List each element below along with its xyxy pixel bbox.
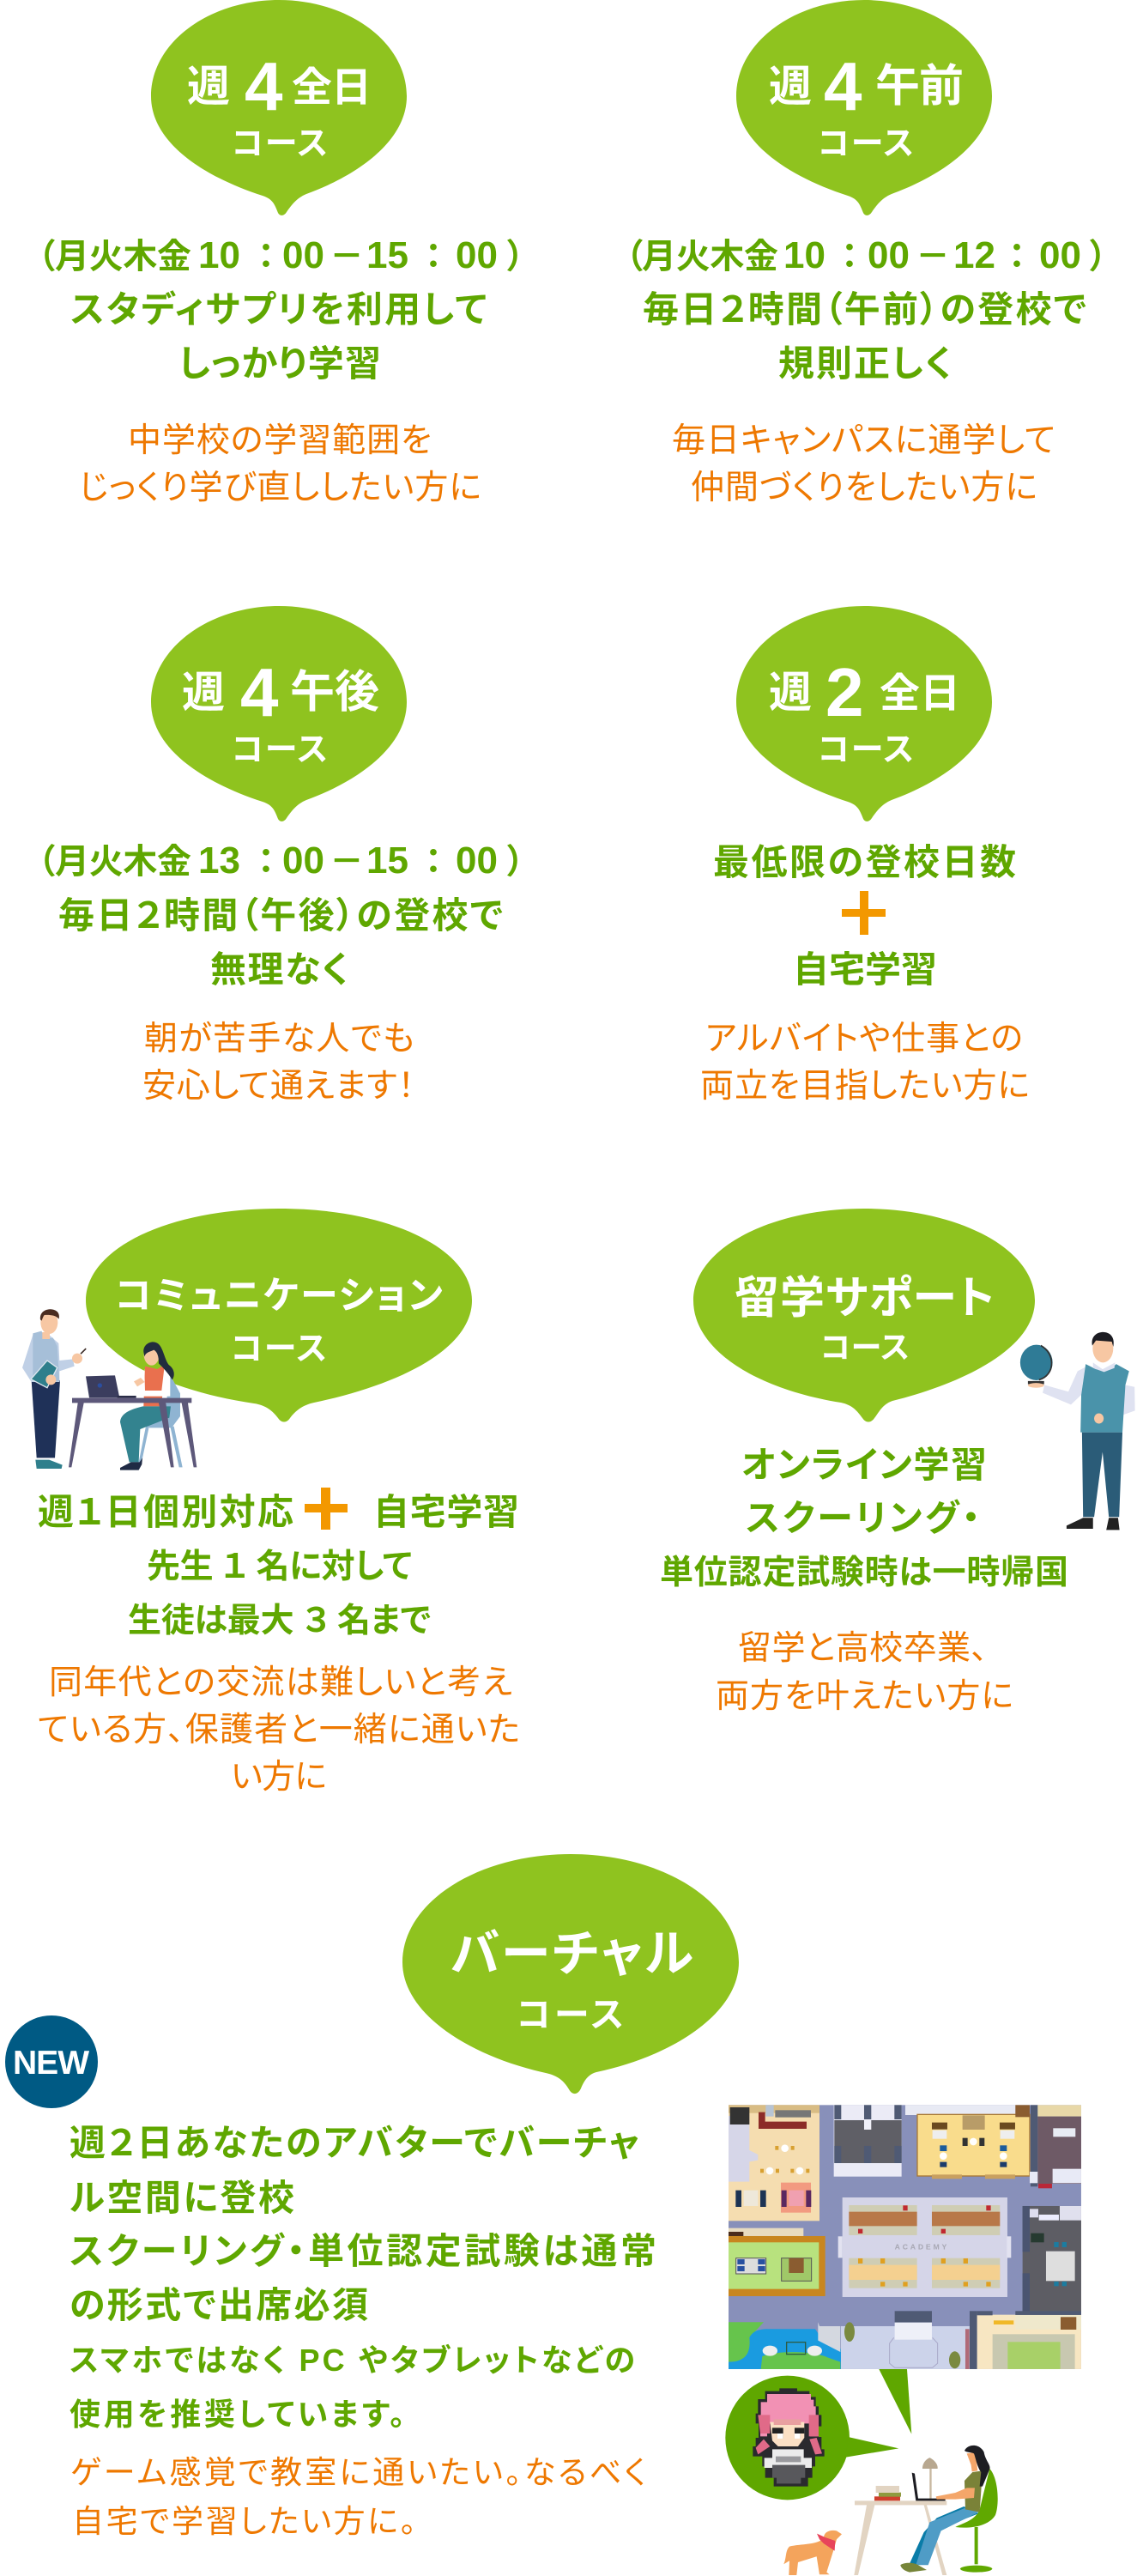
illustration: woman at desk with dog <box>783 2446 998 2575</box>
bubble title: コミュニケーション <box>115 1275 443 1317</box>
target audience <box>142 1021 414 1105</box>
schedule: ） <box>506 238 524 276</box>
bubble title: 週 <box>769 63 812 111</box>
description: スタディサプリを利用して <box>70 289 487 330</box>
description with plus: 自宅学習 <box>373 1492 519 1532</box>
description: 単位認定試験時は一時帰国 <box>660 1555 1068 1591</box>
description with plus <box>38 1492 519 1640</box>
schedule: － <box>330 238 364 276</box>
bubble title: 週 <box>769 669 812 717</box>
description <box>660 1445 1068 1591</box>
schedule: 月火木金 <box>55 843 191 881</box>
description: の形式で出席必須 <box>70 2285 368 2325</box>
schedule: 00 <box>282 234 324 276</box>
description with plus: 週１日個別対応 <box>38 1492 293 1532</box>
schedule: 00 <box>1039 234 1081 276</box>
target audience: 両方を叶えたい方に <box>716 1678 1013 1715</box>
yellow lounge <box>905 2105 1030 2179</box>
target audience <box>716 1630 1013 1715</box>
description: スマホではなく PC やタブレットなどの <box>70 2343 635 2378</box>
bubble title: 全日 <box>292 64 372 110</box>
description: 規則正しく <box>778 343 952 384</box>
entrance plaza <box>841 2311 970 2369</box>
bubble title: 4 <box>245 48 283 124</box>
schedule: ： <box>257 238 275 276</box>
description <box>643 289 1086 384</box>
description: 毎日２時間（午後）の登校で <box>58 895 503 936</box>
description line 1: 最低限の登校日数 <box>713 842 1016 882</box>
schedule: 月火木金 <box>642 238 778 276</box>
avatar bubble <box>725 2369 911 2500</box>
bubble title <box>735 1274 995 1365</box>
bubble title: コース <box>517 1995 624 2034</box>
schedule: 00 <box>282 839 324 882</box>
study room <box>834 2105 902 2177</box>
speech bubble <box>736 606 992 821</box>
schedule: ： <box>257 843 275 881</box>
panel: バーチャルコース <box>5 1854 1081 2575</box>
tatami room <box>729 2228 826 2296</box>
NEW badge <box>5 2015 98 2108</box>
bubble title: 週 <box>187 63 230 111</box>
garden with pond <box>729 2322 841 2369</box>
bubble title: 2 <box>826 654 863 730</box>
target audience: 毎日キャンパスに通学して <box>672 422 1055 459</box>
description <box>70 289 487 384</box>
schedule: 10 <box>198 234 240 276</box>
bubble title <box>769 654 960 768</box>
schedule: （ <box>38 238 56 276</box>
bubble title: 午後 <box>290 668 379 718</box>
bubble title: 4 <box>824 48 862 124</box>
description: しっかり学習 <box>178 343 381 384</box>
icon: plus <box>305 1488 348 1530</box>
target audience: 同年代との交流は難しいと考え <box>49 1664 512 1701</box>
description <box>70 2123 656 2432</box>
avatar: pixel character <box>753 2388 825 2487</box>
schedule <box>626 234 1107 276</box>
target audience <box>70 2455 646 2539</box>
NEW badge: NEW <box>13 2045 89 2082</box>
bubble title: 週 <box>182 669 225 717</box>
schedule: ： <box>425 238 442 276</box>
bottom right gym <box>970 2311 1081 2369</box>
bubble title: コース <box>232 732 328 768</box>
speech bubble <box>86 1209 472 1421</box>
illustration: teacher with globe <box>1020 1332 1135 1530</box>
target audience <box>38 1664 520 1796</box>
target audience: ゲーム感覚で教室に通いたい。なるべく <box>70 2455 646 2490</box>
bubble title <box>451 1926 693 2034</box>
target audience: 両立を目指したい方に <box>700 1068 1030 1105</box>
schedule: ） <box>506 843 524 881</box>
target audience: 朝が苦手な人でも <box>144 1021 414 1058</box>
schedule: － <box>330 843 364 881</box>
panel: 週2全日コース <box>700 606 1030 1105</box>
schedule <box>38 234 524 276</box>
bubble title: 午前 <box>875 62 964 112</box>
target audience <box>79 422 481 506</box>
bubble title <box>115 1275 443 1367</box>
panel: 留学サポートコース <box>660 1209 1135 1715</box>
description: オンライン学習 <box>741 1445 987 1485</box>
bubble title: 4 <box>240 654 279 730</box>
image: virtual campus map <box>729 2105 1081 2369</box>
cafe room <box>729 2105 819 2221</box>
target audience: い方に <box>231 1759 327 1796</box>
schedule: 10 <box>783 234 826 276</box>
schedule: ） <box>1089 238 1107 276</box>
central academy floor <box>838 2197 1011 2297</box>
schedule: 15 <box>366 234 408 276</box>
schedule <box>38 839 524 882</box>
description: ル空間に登校 <box>70 2178 294 2218</box>
description: 使用を推奨しています。 <box>70 2397 405 2432</box>
bubble title <box>187 48 372 162</box>
bubble title <box>769 48 964 162</box>
description with plus: 生徒は最大 ３ 名まで <box>128 1603 431 1640</box>
schedule: ： <box>841 238 858 276</box>
bubble title: バーチャル <box>451 1926 693 1982</box>
panel: 週4全日コース <box>38 0 524 506</box>
target audience <box>700 1021 1030 1105</box>
panel: 週4午後コース <box>38 606 524 1105</box>
description line 2: 自宅学習 <box>793 949 937 990</box>
bubble title: コース <box>818 126 914 162</box>
bubble title: コース <box>231 1331 327 1367</box>
target audience <box>672 422 1055 506</box>
dark meeting room <box>1023 2206 1081 2312</box>
target audience: 自宅で学習したい方に。 <box>72 2504 416 2539</box>
bubble title: コース <box>818 732 914 768</box>
top right room <box>1030 2105 1081 2188</box>
target audience: 仲間づくりをしたい方に <box>691 470 1037 506</box>
speech bubble <box>151 606 407 821</box>
schedule: 月火木金 <box>55 238 191 276</box>
bubble title <box>182 654 379 768</box>
schedule: 00 <box>868 234 910 276</box>
schedule: 15 <box>366 839 408 882</box>
description: 毎日２時間（午前）の登校で <box>643 289 1086 330</box>
target audience: 中学校の学習範囲を <box>128 422 432 459</box>
schedule: 12 <box>953 234 995 276</box>
description <box>58 895 503 990</box>
target audience: 留学と高校卒業、 <box>738 1630 988 1667</box>
description: スクーリング・ <box>746 1498 980 1538</box>
description: 週２日あなたのアバターでバーチャ <box>70 2123 639 2163</box>
central academy floor: ACADEMY <box>895 2243 947 2252</box>
schedule: （ <box>626 238 644 276</box>
bubble title: 全日 <box>880 670 960 716</box>
icon: plus <box>842 891 886 935</box>
panel: コミュニケーションコース <box>22 1209 520 1796</box>
speech bubble <box>151 0 407 215</box>
schedule: 13 <box>198 839 240 882</box>
bubble title: 留学サポート <box>735 1274 995 1324</box>
panel: 週4午前コース <box>626 0 1107 506</box>
speech bubble <box>402 1854 739 2094</box>
description: 無理なく <box>210 949 348 990</box>
schedule: 00 <box>456 839 498 882</box>
target audience: 安心して通えます！ <box>142 1068 414 1105</box>
schedule: ： <box>425 843 442 881</box>
bubble title: コース <box>232 126 328 162</box>
bubble title: コース <box>820 1330 910 1365</box>
target audience: じっくり学び直ししたい方に <box>79 470 481 506</box>
speech bubble <box>736 0 992 215</box>
schedule: ： <box>1008 238 1025 276</box>
schedule: － <box>916 238 950 276</box>
speech bubble <box>693 1209 1035 1421</box>
target audience: ている方、保護者と一緒に通いた <box>38 1712 520 1749</box>
target audience: アルバイトや仕事との <box>705 1021 1023 1058</box>
description with plus: 先生 １ 名に対して <box>147 1549 412 1585</box>
illustration: teacher and student at desk <box>22 1309 197 1470</box>
description: スクーリング・単位認定試験は通常 <box>70 2231 656 2271</box>
schedule: （ <box>38 843 56 881</box>
schedule: 00 <box>456 234 498 276</box>
